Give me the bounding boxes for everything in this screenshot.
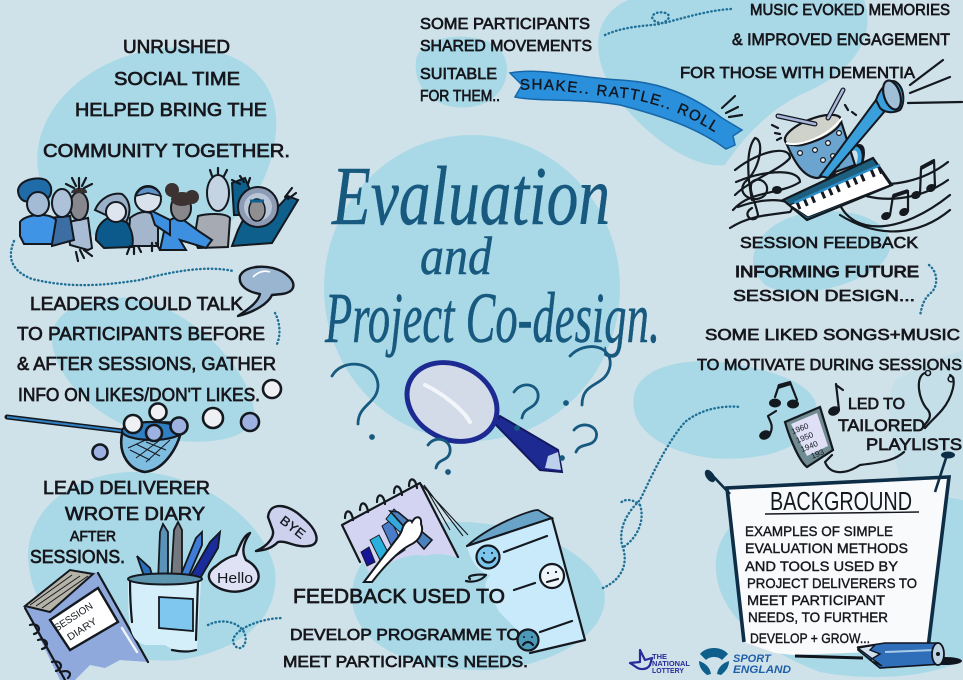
title: Project Co-design.	[324, 278, 660, 358]
text: music evoked memories: MUSIC EVOKED MEMORIES	[750, 2, 950, 19]
text: background description: NEEDS, TO FURTHER	[748, 609, 888, 625]
text: some participants shared movements: SUITABLE	[420, 66, 497, 83]
text: leaders could talk: LEADERS COULD TALK	[30, 294, 243, 314]
text: session feedback	[733, 235, 919, 305]
icon: speech bubble hello: Hello	[217, 570, 253, 587]
icon: music player	[758, 370, 954, 472]
text: some participants shared movements	[420, 16, 592, 105]
text: led to tailored playlists: LED TO	[848, 396, 905, 413]
text: background description: EXAMPLES OF SIMPLE	[745, 523, 893, 539]
heading: background: BACKGROUND	[770, 486, 912, 516]
text: leaders could talk	[17, 294, 276, 405]
text: some liked songs and music: SOME LIKED SONGS+MUSIC	[705, 327, 960, 344]
text: led to tailored playlists	[838, 396, 962, 454]
icon: speech bubble bye: BYE	[277, 513, 309, 542]
illustration: music instruments	[730, 60, 962, 231]
text: session feedback: INFORMING FUTURE	[735, 264, 919, 281]
logo: the national lottery: LOTTERY	[652, 666, 684, 675]
text: background description: DEVELOP + GROW...	[750, 630, 870, 646]
text: unrushed social time: UNRUSHED	[123, 37, 230, 57]
title: and	[420, 226, 493, 286]
icon: session diary	[25, 570, 148, 680]
text: background description: PROJECT DELIVERERS TO	[747, 575, 917, 591]
text: led to tailored playlists: TAILORED	[838, 416, 925, 435]
text: leaders could talk: & AFTER SESSIONS, GATHER	[17, 354, 276, 374]
icon: pencil	[795, 643, 962, 668]
icon: music player: 1940	[799, 439, 820, 454]
text: some participants shared movements: SOME PARTICIPANTS	[420, 16, 590, 33]
title	[324, 150, 660, 358]
text: lead deliverer wrote diary: LEAD DELIVERER	[43, 478, 210, 498]
text: feedback used to develop programme: DEVELOP PROGRAMME TO	[290, 627, 520, 644]
text: unrushed social time: SOCIAL TIME	[114, 69, 240, 89]
text: some liked songs and music: TO MOTIVATE DURING SESSIONS	[697, 357, 962, 374]
text: leaders could talk: INFO ON LIKES/DON'T LIKES.	[18, 385, 260, 405]
text: leaders could talk: TO PARTICIPANTS BEFORE	[17, 324, 265, 344]
logo: sport england: SPORT	[733, 653, 772, 665]
icon: speech bubble top left	[238, 267, 293, 316]
text: background description	[745, 523, 917, 646]
icon: music player: 1960	[790, 421, 810, 436]
text: session feedback: SESSION DESIGN...	[733, 288, 915, 305]
text: some liked songs and music	[697, 327, 962, 374]
logo: the national lottery: THE	[652, 652, 667, 661]
text: unrushed social time: COMMUNITY TOGETHER.	[43, 141, 290, 161]
text: background description: AND TOOLS USED BY	[745, 558, 899, 574]
banner: shake rattle roll	[508, 70, 744, 150]
text: background description: MEET PARTICIPANT	[747, 592, 885, 608]
panel: background board	[703, 452, 955, 655]
logo: sport england	[699, 648, 791, 676]
text: lead deliverer wrote diary: WROTE DIARY	[65, 504, 205, 524]
text: lead deliverer wrote diary: SESSIONS.	[30, 547, 125, 567]
icon: notebook with bar chart	[342, 479, 468, 582]
text: unrushed social time: HELPED BRING THE	[75, 100, 267, 120]
icon: magnifying glass	[393, 347, 562, 472]
text: background description: EVALUATION METHODS	[745, 540, 908, 556]
illustration: scoop net with balls	[7, 380, 281, 472]
music notes right	[880, 160, 937, 222]
text: music evoked memories: FOR THOSE WITH DEMENTIA	[680, 65, 915, 82]
text: session feedback: SESSION FEEDBACK	[740, 235, 918, 252]
text: lead deliverer wrote diary: AFTER	[70, 528, 116, 545]
logo: the national lottery: NATIONAL	[652, 659, 690, 668]
illustration: group of people	[18, 168, 298, 261]
text: unrushed social time	[43, 37, 290, 161]
icon: session diary: DIARY	[66, 616, 99, 643]
text: some participants shared movements: SHARED MOVEMENTS	[420, 38, 592, 55]
text: feedback used to develop programme: FEEDBACK USED TO	[293, 586, 505, 608]
logo: the national lottery	[630, 650, 690, 675]
icon: pen pot	[128, 522, 220, 652]
text: lead deliverer wrote diary	[30, 478, 210, 567]
icons: question marks	[332, 347, 610, 474]
text: feedback used to develop programme	[283, 586, 528, 671]
icon: feedback sheet with smileys	[466, 510, 585, 653]
title: Evaluation	[331, 150, 610, 243]
text: led to tailored playlists: PLAYLISTS	[866, 435, 962, 454]
logo: sport england: ENGLAND	[733, 664, 791, 676]
icon: session diary: SESSION	[52, 601, 95, 634]
text: some participants shared movements: FOR THEM..	[420, 88, 500, 105]
icon: speech bubble bye	[256, 506, 317, 551]
icon: music player: 1950	[795, 430, 815, 445]
icon: speech bubble hello	[209, 533, 259, 592]
banner: shake rattle roll: SHAKE.. RATTLE.. ROLL	[520, 78, 716, 132]
text: music evoked memories: & IMPROVED ENGAGEMENT	[732, 30, 950, 49]
text: feedback used to develop programme: MEET PARTICIPANTS NEEDS.	[283, 654, 528, 671]
text: music evoked memories	[680, 2, 950, 82]
icon: music player: 193	[810, 447, 826, 461]
